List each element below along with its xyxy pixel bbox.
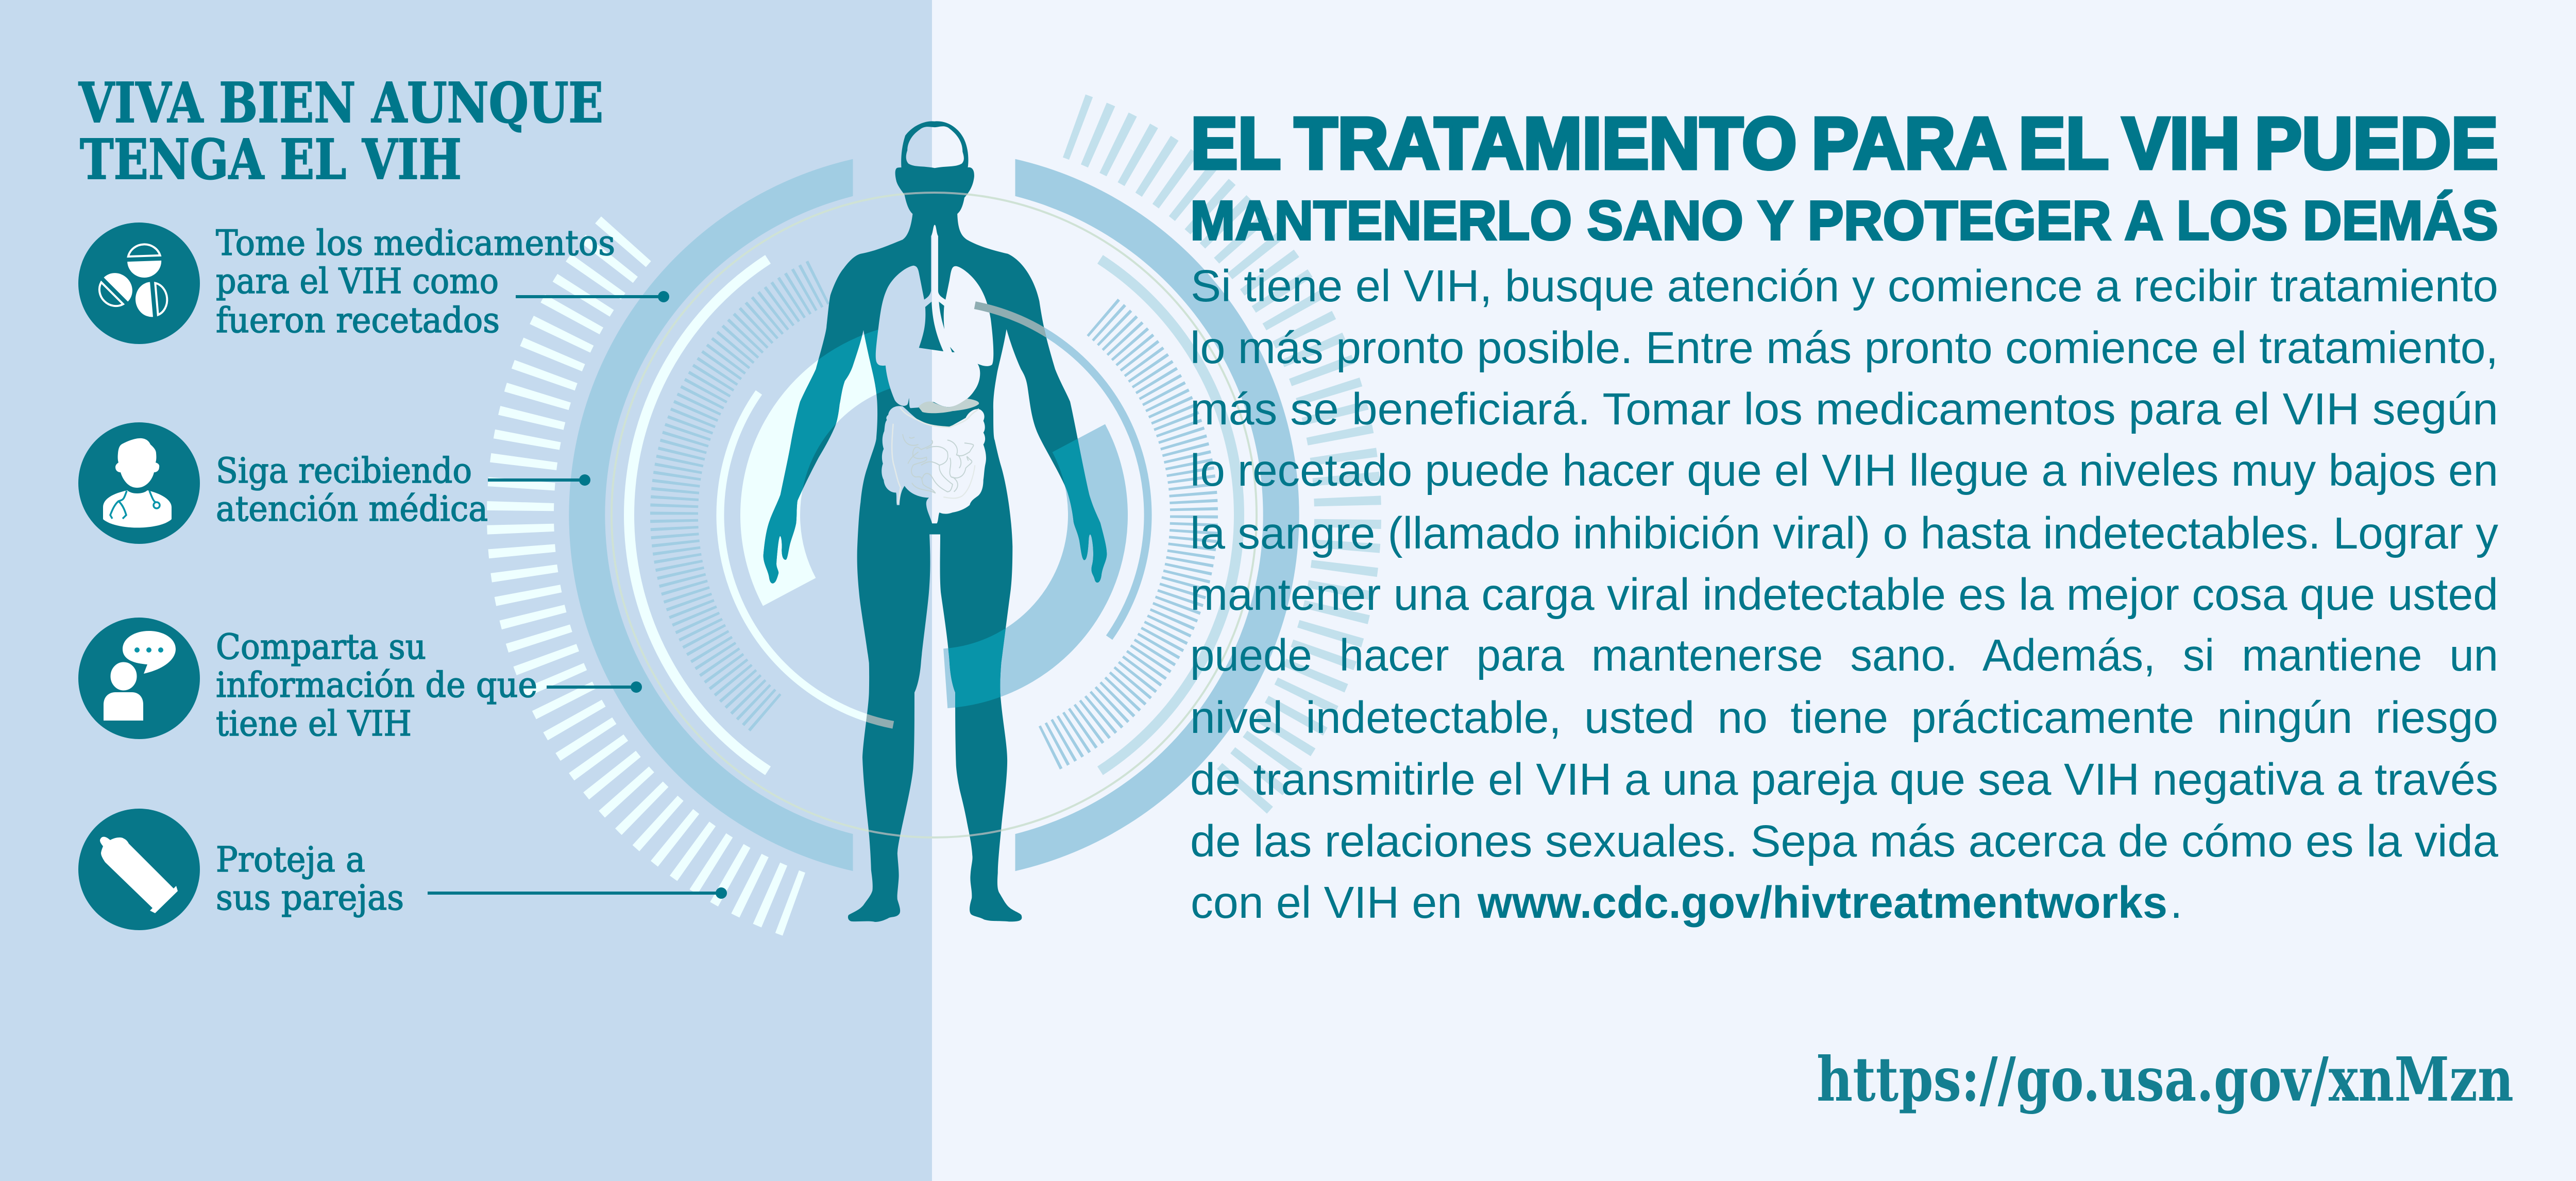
- heading: viva bien: TENGA EL VIH: [80, 128, 462, 192]
- body paragraph: lo recetado puede hacer que el VIH llegue a niveles muy bajos en: [1190, 446, 2498, 495]
- text: medical care: [216, 451, 488, 529]
- item: take medication: [78, 222, 669, 344]
- panel: right background: [932, 0, 2576, 1181]
- right wide inner band: [945, 438, 1098, 678]
- text: share status: [216, 627, 537, 744]
- heading: viva bien: [78, 71, 603, 192]
- item: share status: [78, 618, 642, 744]
- connector line: [547, 681, 642, 693]
- text: take medication: [216, 223, 615, 340]
- title: treatment: MANTENERLO SANO Y PROTEGER A LOS DEMÁS: [1190, 189, 2498, 251]
- connector line: [488, 474, 590, 486]
- body paragraph: de transmitirle el VIH a una pareja que sea VIH negativa a través: [1190, 755, 2498, 805]
- body paragraph: www.cdc.gov/hivtreatmentworks: [1477, 878, 2167, 928]
- right fine ticks: [1049, 317, 1194, 748]
- item: medical care: [78, 422, 590, 544]
- small gap above intestines: [940, 420, 950, 423]
- heading: viva bien: VIVA BIEN AUNQUE: [78, 71, 603, 135]
- concentric ring graphic: [520, 126, 1348, 904]
- gaps between lungs: [919, 302, 955, 352]
- body paragraph: nivel indetectable, usted no tiene prácticamente ningún riesgo: [1190, 693, 2498, 743]
- text: protect partners: Proteja a: [216, 840, 365, 880]
- brain: [906, 126, 964, 168]
- icon: pills: [78, 222, 200, 344]
- body paragraph: la sangre (llamado inhibición viral) o hasta indetectables. Lograr y: [1190, 508, 2499, 558]
- body paragraph: puede hacer para mantenerse sano. Además, si mantiene un: [1190, 630, 2498, 680]
- text: protect partners: [216, 840, 404, 918]
- body paragraph: más se beneficiará. Tomar los medicamentos para el VIH según: [1190, 384, 2498, 434]
- left wide inner band: [770, 352, 923, 592]
- band overlap on body: [770, 352, 1098, 678]
- text: share status: información de que: [216, 665, 537, 705]
- right outer thick arc: [1015, 159, 1299, 871]
- body paragraph: con el VIH en: [1191, 878, 1462, 928]
- arcs crossing the body: [612, 193, 1257, 837]
- body paragraph: de las relaciones sexuales. Sepa más acerca de cómo es la vida: [1190, 816, 2499, 866]
- left outer thick arc: [569, 159, 853, 871]
- icon: person with speech bubble: [78, 618, 200, 739]
- body paragraph: [1190, 261, 2499, 928]
- text: medical care: Siga recibiendo: [216, 451, 472, 491]
- body paragraph: .: [2170, 878, 2182, 928]
- text: take medication: Tome los medicamentos: [216, 223, 615, 263]
- left fine ticks: [674, 282, 819, 713]
- panel: left background: [0, 0, 932, 1181]
- intestine folds: [892, 407, 979, 504]
- connector line: [428, 887, 727, 899]
- text: medical care: atención médica: [216, 489, 488, 529]
- intestines: [882, 406, 986, 523]
- organs: [876, 126, 993, 523]
- human body figure: [764, 121, 1107, 922]
- title: treatment: [1190, 102, 2498, 251]
- title: treatment: EL TRATAMIENTO PARA EL VIH PUEDE: [1191, 102, 2498, 184]
- text: take medication: fueron recetados: [216, 300, 500, 340]
- text: protect partners: sus parejas: [216, 878, 404, 918]
- connector line: [516, 291, 669, 302]
- right pale arc: [1100, 260, 1239, 771]
- body paragraph: mantener una carga viral indetectable es la mejor cosa que usted: [1190, 570, 2498, 620]
- text: take medication: para el VIH como: [216, 261, 499, 301]
- stomach: [919, 399, 979, 413]
- thin green circle: [612, 193, 1257, 837]
- icon: condom: [78, 809, 200, 930]
- right outer radial ticks: [1074, 126, 1348, 791]
- icon: doctor: [78, 422, 200, 544]
- left thin inner arc: [720, 392, 893, 725]
- body paragraph: Si tiene el VIH, busque atención y comience a recibir tratamiento: [1191, 261, 2498, 311]
- item: protect partners: [78, 809, 727, 930]
- text: share status: Comparta su: [216, 627, 426, 667]
- body silhouette: [764, 121, 1107, 922]
- text: share status: tiene el VIH: [216, 704, 412, 744]
- left white arc: [629, 260, 768, 771]
- left outer radial ticks: [520, 239, 794, 904]
- lungs, trachea and liver: [876, 225, 993, 408]
- right thin inner arc: [975, 305, 1148, 638]
- body paragraph: lo más pronto posible. Entre más pronto comience el tratamiento,: [1190, 323, 2498, 373]
